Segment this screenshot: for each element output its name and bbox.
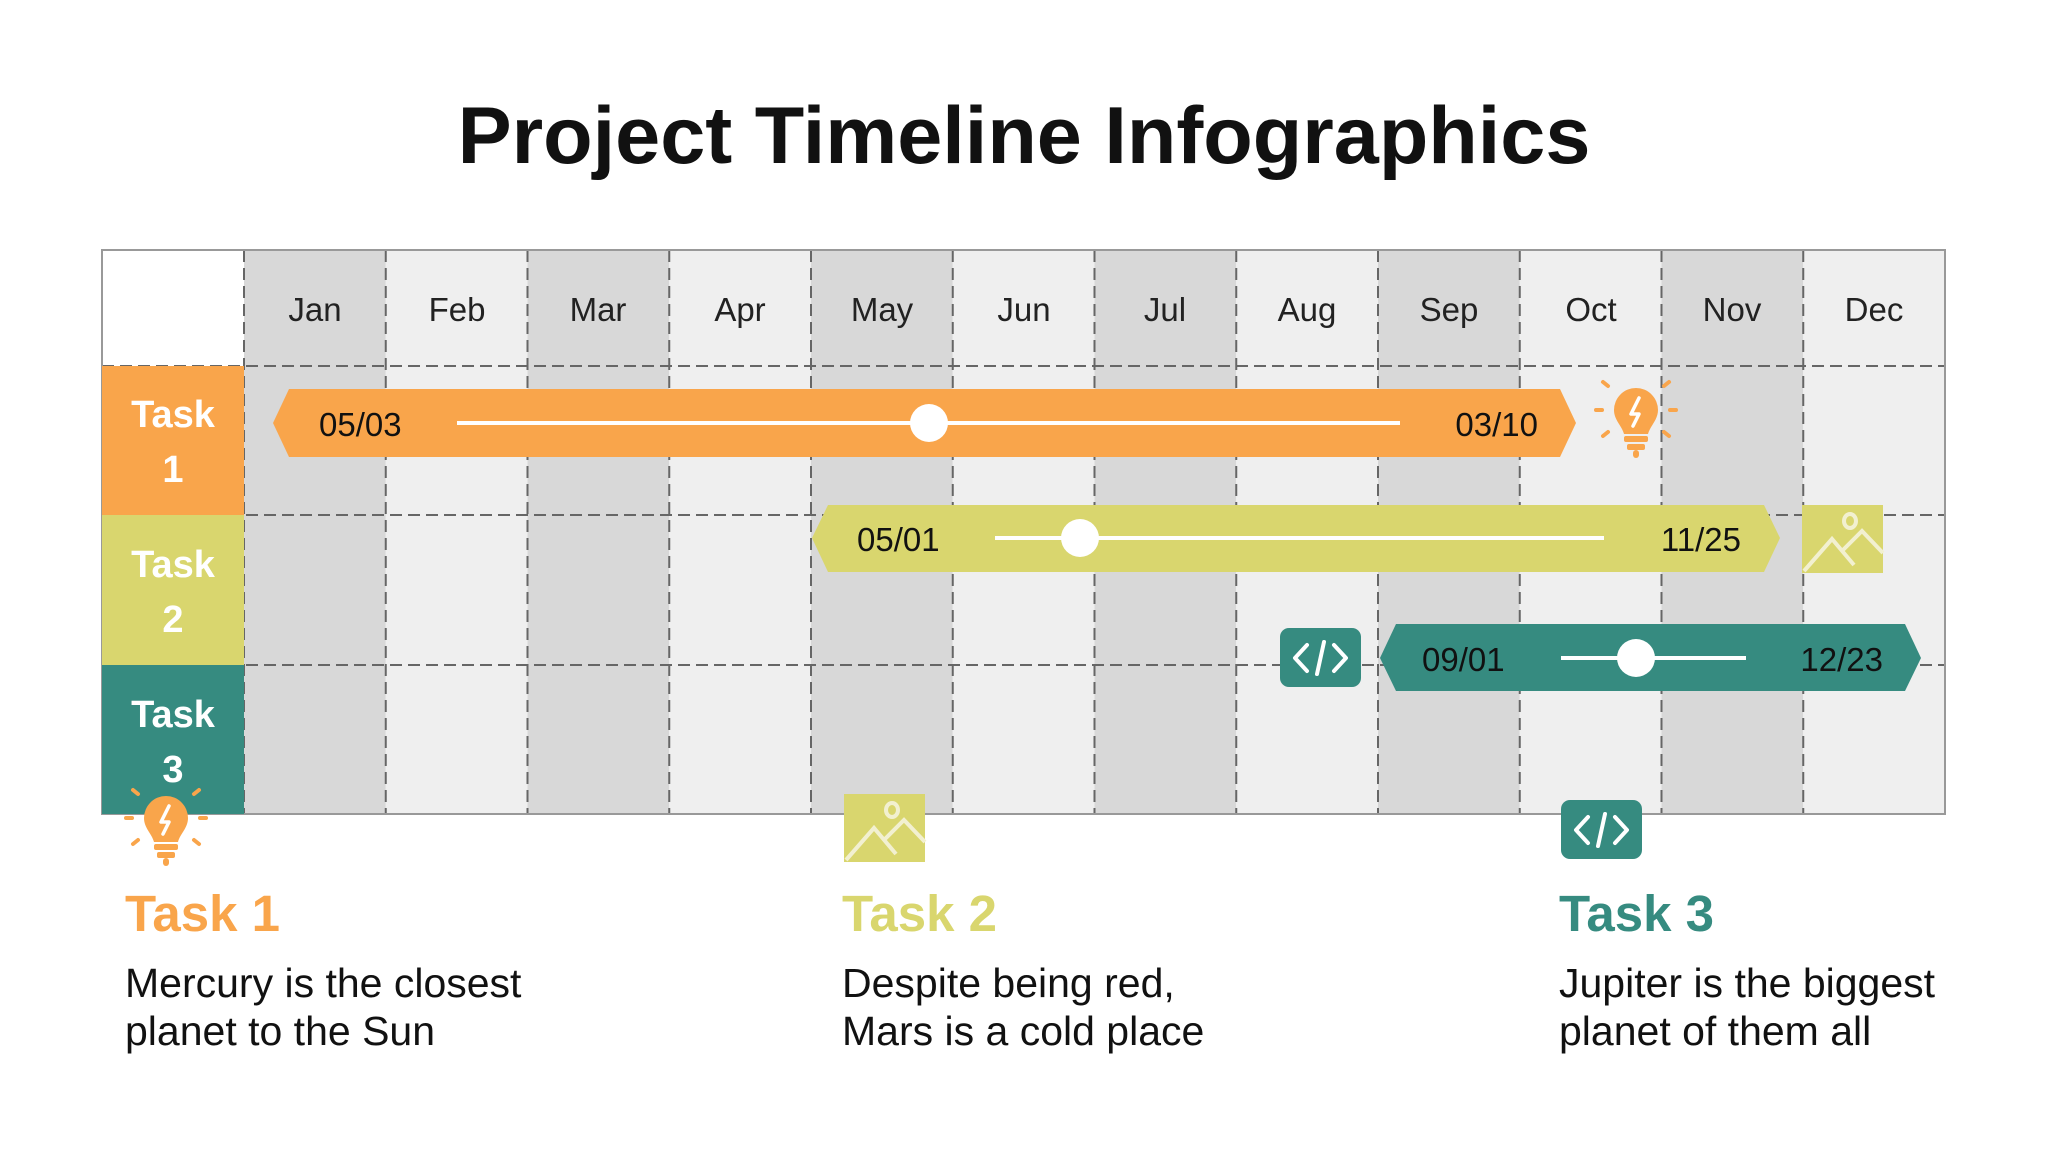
month headers (288, 291, 1903, 328)
task label: Task 3 (102, 665, 244, 814)
month headers: Jul (1144, 291, 1186, 328)
month headers: Jan (288, 291, 342, 328)
bar: task 3: 12/23 (1800, 641, 1883, 678)
month headers: May (851, 291, 914, 328)
bar: task 1: 05/03 (319, 406, 402, 443)
title: Project Timeline Infographics (458, 91, 1590, 181)
task label: Task 2: 2 (162, 599, 184, 641)
month headers: Apr (714, 291, 766, 328)
gantt chart grid (102, 250, 1945, 814)
icon: lightbulb (126, 790, 206, 866)
task label: Task 1: Task (131, 394, 216, 436)
icon: image (844, 794, 925, 862)
icon: image task 2 (1802, 505, 1883, 573)
panel: task 3 description (1559, 800, 1936, 1054)
task label: Task 2 (102, 515, 244, 665)
panel: task 3 description: Task 3 (1559, 885, 1714, 942)
panel: task 1 description: planet to the Sun (125, 1008, 435, 1054)
panel: task 1 description (125, 790, 522, 1054)
task label: Task 3: Task (131, 694, 216, 736)
icon: code task 3 (1280, 628, 1361, 687)
month headers: Nov (1703, 291, 1762, 328)
panel: task 1 description: Task 1 (125, 885, 280, 942)
panel: task 2 description: Despite being red, (842, 960, 1175, 1006)
task label: Task 2: Task (131, 544, 216, 586)
panel: task 2 description: Task 2 (842, 885, 997, 942)
month headers: Feb (429, 291, 485, 328)
panel: task 1 description: Mercury is the closest (125, 960, 522, 1006)
bar: task 3: 09/01 (1422, 641, 1505, 678)
month headers: Mar (570, 291, 626, 328)
task label: Task 1 (102, 366, 244, 515)
month headers: Oct (1565, 291, 1617, 328)
bar: task 2: 11/25 (1661, 521, 1741, 558)
bar: task 3 (1380, 624, 1921, 691)
task label: Task 1: 1 (162, 449, 184, 491)
icon: code (1561, 800, 1642, 859)
task label: Task 3: 3 (162, 749, 184, 791)
bar: task 1 (273, 389, 1576, 457)
bar: task 1: 03/10 (1455, 406, 1538, 443)
panel: task 3 description: Jupiter is the biggest (1559, 960, 1936, 1006)
month headers: Aug (1278, 291, 1336, 328)
month headers: Jun (997, 291, 1051, 328)
month headers: Sep (1420, 291, 1478, 328)
bar: task 2: 05/01 (857, 521, 940, 558)
month headers: Dec (1845, 291, 1903, 328)
icon: lightbulb task 1 (1596, 382, 1676, 458)
panel: task 2 description: Mars is a cold place (842, 1008, 1204, 1054)
panel: task 3 description: planet of them all (1559, 1008, 1871, 1054)
panel: task 2 description (842, 794, 1204, 1054)
bar: task 2 (812, 505, 1780, 572)
